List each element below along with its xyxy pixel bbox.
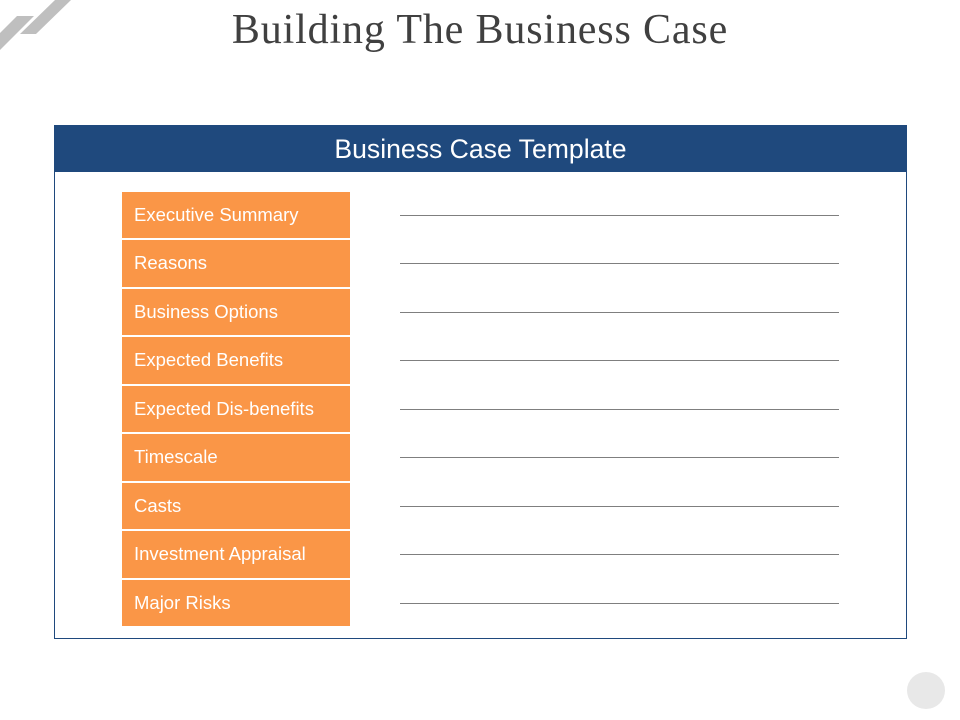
- icon: corner stripes: [0, 0, 71, 50]
- row: Expected Benefits: Expected Benefits: [134, 349, 283, 370]
- answer line 1: [400, 215, 839, 216]
- row: Business Options: Business Options: [134, 301, 278, 322]
- answer line 2: [400, 263, 839, 264]
- row: Executive Summary: [122, 192, 350, 238]
- row: Investment Appraisal: [122, 531, 350, 578]
- row: Expected Dis-benefits: [122, 386, 350, 432]
- answer line 9: [400, 603, 839, 604]
- icon: page number circle: [907, 672, 945, 709]
- heading: template header: [54, 125, 907, 172]
- row: Casts: [122, 483, 350, 529]
- row: Major Risks: Major Risks: [134, 592, 231, 613]
- row: Major Risks: [122, 580, 350, 626]
- row: Executive Summary: Executive Summary: [134, 204, 298, 225]
- row: Investment Appraisal: Investment Appraisal: [134, 543, 306, 564]
- answer line 7: [400, 506, 839, 507]
- heading: template header: Business Case Template: [334, 134, 627, 164]
- answer line 8: [400, 554, 839, 555]
- answer line 5: [400, 409, 839, 410]
- row: Business Options: [122, 289, 350, 335]
- answer line 6: [400, 457, 839, 458]
- row: Expected Dis-benefits: Expected Dis-benefits: [134, 398, 314, 419]
- row: Reasons: [122, 240, 350, 287]
- row: Casts: Casts: [134, 495, 181, 516]
- panel: template outline: [54, 125, 907, 639]
- row: Timescale: [122, 434, 350, 481]
- row: Expected Benefits: [122, 337, 350, 384]
- answer line 4: [400, 360, 839, 361]
- row: Timescale: Timescale: [134, 446, 218, 467]
- title: Building The Business Case: [232, 7, 728, 53]
- row: Reasons: Reasons: [134, 252, 207, 273]
- answer line 3: [400, 312, 839, 313]
